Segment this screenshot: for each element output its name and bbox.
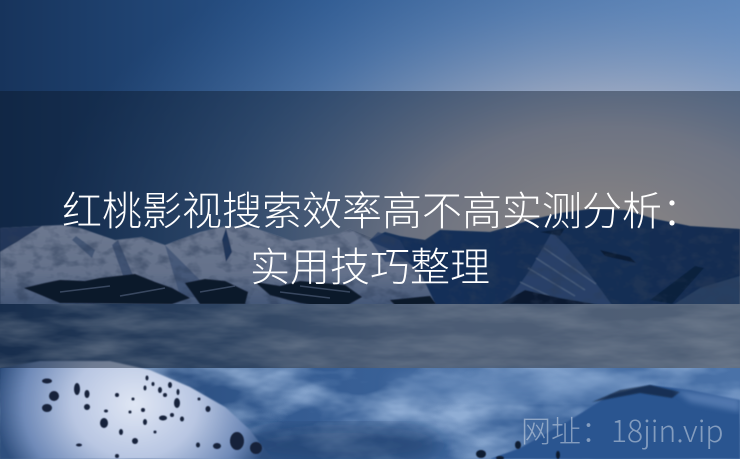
watermark: 网址：18jin.vip bbox=[521, 407, 724, 451]
sea of clouds, far layer bbox=[0, 304, 740, 374]
mountain rock texture bbox=[0, 220, 740, 305]
title line 2: 实用技巧整理 bbox=[250, 235, 490, 293]
dark rock bands along the mountain foot bbox=[24, 274, 436, 309]
snowy hill, bottom left bbox=[0, 361, 272, 459]
dark hill, bottom right bbox=[476, 385, 740, 459]
sea of clouds, near layer bbox=[0, 368, 740, 459]
dark translucent band bbox=[0, 91, 740, 368]
title line 1: 红桃影视搜索效率高不高实测分析： bbox=[62, 179, 702, 237]
snow streaks over rock bands bbox=[60, 286, 350, 298]
snow-covered mountains on the left bbox=[0, 225, 436, 305]
distant navy mountains on the right bbox=[330, 209, 740, 310]
sky bbox=[0, 0, 740, 320]
